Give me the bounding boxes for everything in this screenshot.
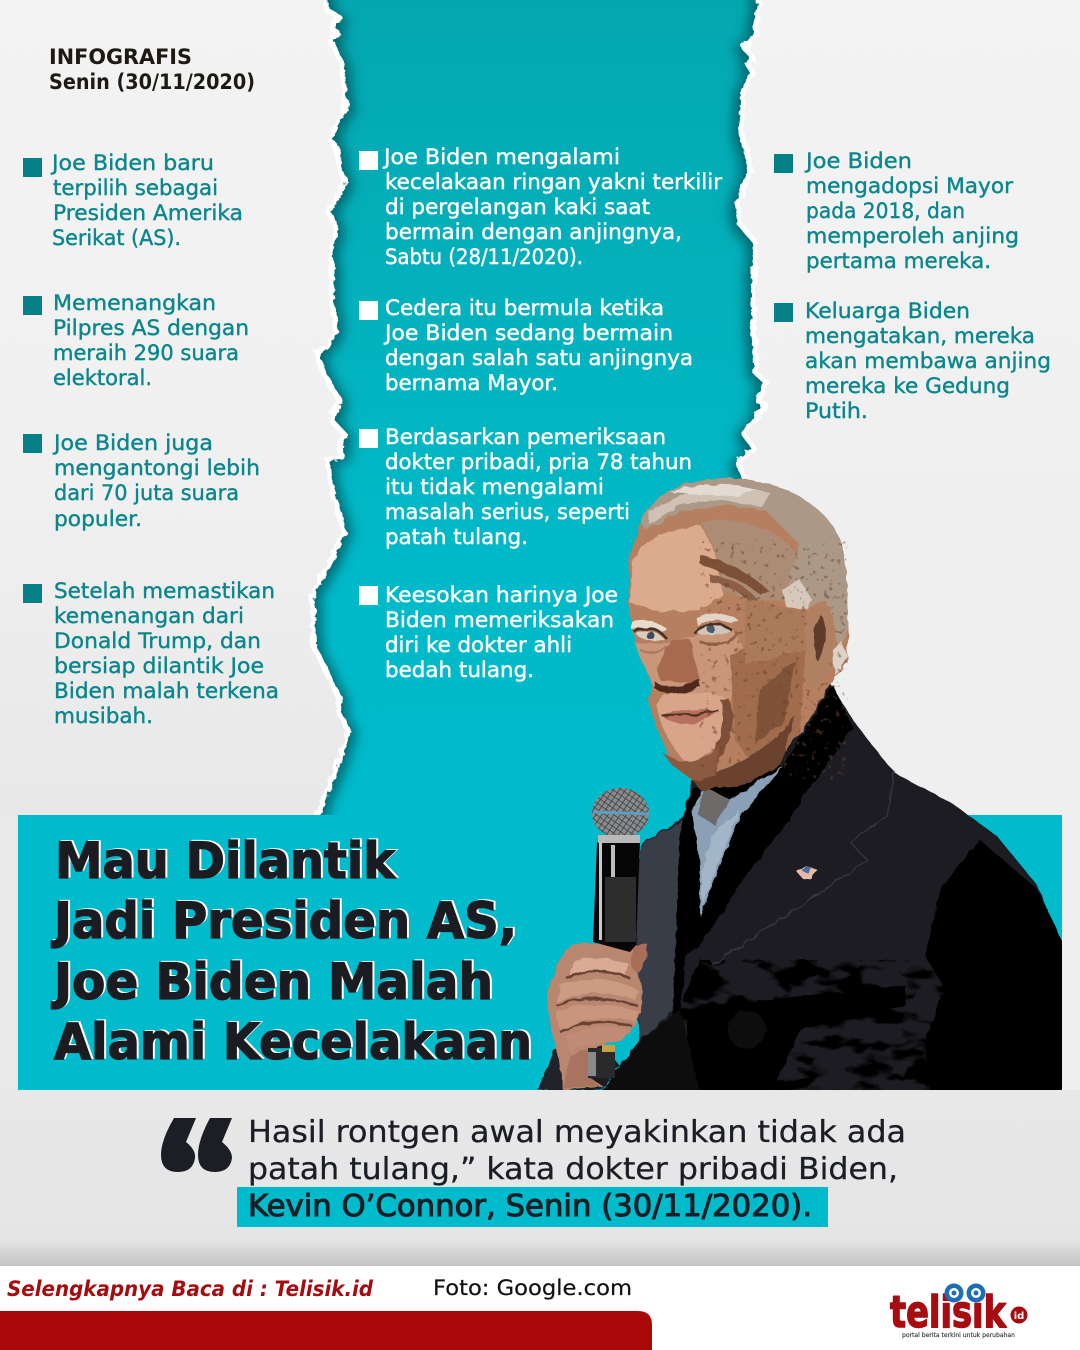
bullet item: Gedung Putih: akan membawa anjing <box>805 349 1051 373</box>
bullet item: kecelakaan ringan <box>359 145 722 269</box>
panel: left margin below paper <box>0 815 18 1090</box>
title: Alami Kecelakaan <box>54 1013 532 1071</box>
bullet item: adopsi Mayor: pada 2018, dan <box>806 199 965 223</box>
bullet item: adopsi Mayor: pertama mereka. <box>806 249 991 273</box>
quote text <box>248 1115 906 1224</box>
bullet item: 290 suara elektoral: Memenangkan <box>53 291 216 315</box>
header text: Senin (30/11/2020) <box>49 70 255 94</box>
panel: torn teal centre strip <box>300 0 780 830</box>
panel: title box <box>18 815 1062 1090</box>
bullet item: musibah: Setelah memastikan <box>54 579 275 603</box>
panel: quote strip <box>0 1090 1080 1266</box>
bullet item: terpilih: Presiden Amerika <box>53 201 243 225</box>
logo: telisik.id: portal berita terkini untuk perubahan <box>902 1331 1015 1339</box>
bullet item: Gedung Putih: mereka ke Gedung <box>805 374 1010 398</box>
title: Mau Dilantik <box>57 831 399 889</box>
bullet item: adopsi Mayor <box>774 149 1019 273</box>
logo: telisik.id: telisik <box>890 1287 1007 1338</box>
bullet item: musibah: Donald Trump, dan <box>54 629 261 653</box>
bullet item: pemeriksaan dokter: Berdasarkan pemeriksaan <box>385 425 666 449</box>
bullet item: 70 juta suara populer: mengantongi lebih <box>54 456 260 480</box>
bullet item: kecelakaan ringan: di pergelangan kaki saat <box>385 195 650 219</box>
panel: right column bullets <box>774 149 1051 423</box>
bullet item: pemeriksaan dokter: masalah serius, seperti <box>385 500 630 524</box>
microphone <box>588 788 649 1078</box>
bullet item: cedera: Cedera itu bermula ketika <box>385 296 664 320</box>
bullet item: pemeriksaan dokter <box>359 425 692 549</box>
bullet item: pemeriksaan dokter: itu tidak mengalami <box>385 475 604 499</box>
head <box>628 478 848 790</box>
panel: right torn paper <box>738 0 1080 1130</box>
title: Joe Biden Malah <box>51 953 493 1011</box>
bullet item: 290 suara elektoral: meraih 290 suara <box>53 341 239 365</box>
title: Alami Kecelakaan <box>56 1012 534 1070</box>
bullet item: pemeriksaan dokter: patah tulang. <box>385 525 528 549</box>
bullet item: dokter ahli bedah: Biden memeriksakan <box>385 608 614 632</box>
bullet item: Gedung Putih: Putih. <box>805 399 868 423</box>
shirt collar <box>692 766 783 917</box>
bullet item: cedera: dengan salah satu anjingnya <box>385 346 693 370</box>
title: Jadi Presiden AS, <box>51 892 517 950</box>
title: Mau Dilantik <box>55 832 397 890</box>
bullet item: kecelakaan ringan: kecelakaan ringan yakni terkilir <box>385 170 722 194</box>
bullet item: kecelakaan ringan: Joe Biden mengalami <box>382 145 620 169</box>
bullet item: 290 suara elektoral <box>23 291 249 390</box>
title <box>51 831 534 1071</box>
bullet item: dokter ahli bedah <box>359 583 618 682</box>
bullet item: terpilih: Serikat (AS). <box>52 226 181 250</box>
footer photo credit: Foto: Google.com <box>433 1276 632 1300</box>
bullet item: terpilih: terpilih sebagai <box>53 176 218 200</box>
bullet item: pemeriksaan dokter: dokter pribadi, pria 78 tahun <box>385 450 692 474</box>
bullet item: 70 juta suara populer <box>23 431 260 531</box>
eyes and brows <box>632 613 742 653</box>
logo binoculars <box>944 1284 986 1302</box>
bullet item: Gedung Putih <box>774 299 1051 423</box>
panel: left torn paper <box>0 0 349 1130</box>
bullet item: musibah: bersiap dilantik Joe <box>54 654 264 678</box>
bullet item: musibah: Biden malah terkena <box>54 679 279 703</box>
header text <box>49 45 255 94</box>
panel: left column bullets <box>23 151 279 728</box>
ear <box>804 603 835 688</box>
bullet item: kecelakaan ringan: Sabtu (28/11/2020). <box>385 245 583 269</box>
illustration: Joe Biden with microphone <box>538 478 1066 1094</box>
bullet item: dokter ahli bedah: Keesokan harinya Joe <box>385 583 618 607</box>
icon: quotation marks <box>161 1118 232 1172</box>
bullet item: Gedung Putih: Keluarga Biden <box>805 299 970 323</box>
hand <box>547 942 647 1090</box>
bullet item: adopsi Mayor: Joe Biden <box>804 149 912 173</box>
bullet item: cedera: Joe Biden sedang bermain <box>383 321 673 345</box>
bullet item: cedera: bernama Mayor. <box>385 371 558 395</box>
bullet item: cedera <box>359 296 693 395</box>
bullet item: Gedung Putih: mengatakan, mereka <box>805 324 1035 348</box>
panel: right side paper lower area <box>790 470 1080 1090</box>
bullet item: kecelakaan ringan: bermain dengan anjingnya, <box>385 220 682 244</box>
quote text: Hasil rontgen awal meyakinkan tidak ada <box>248 1115 906 1150</box>
bullet item: adopsi Mayor: memperoleh anjing <box>806 224 1019 248</box>
quote text: Kevin O’Connor, Senin (30/11/2020). <box>248 1189 812 1224</box>
bullet item: 70 juta suara populer: dari 70 juta suara <box>54 481 239 505</box>
header text: INFOGRAFIS <box>49 45 192 69</box>
bullet item: 290 suara elektoral: Pilpres AS dengan <box>53 316 249 340</box>
bullet item: adopsi Mayor: mengadopsi Mayor <box>806 174 1013 198</box>
bullet item: musibah: kemenangan dari <box>54 604 244 628</box>
bullet item: 70 juta suara populer: Joe Biden juga <box>52 431 213 455</box>
jacket <box>538 683 1066 1094</box>
bullet item: terpilih: Joe Biden baru <box>50 151 214 175</box>
footer source link: Selengkapnya Baca di : Telisik.id <box>7 1277 374 1301</box>
flag pin <box>797 866 818 879</box>
title: Jadi Presiden AS, <box>53 891 519 949</box>
bullet item: terpilih <box>23 151 243 250</box>
bullet item: musibah <box>23 579 279 728</box>
bullet item: dokter ahli bedah: bedah tulang. <box>385 658 534 682</box>
bullet item: 70 juta suara populer: populer. <box>54 507 142 531</box>
footer red bar <box>0 1311 652 1350</box>
logo: telisik.id: id <box>1014 1311 1024 1322</box>
title: Joe Biden Malah <box>53 952 495 1010</box>
bullet item: 290 suara elektoral: elektoral. <box>53 366 152 390</box>
panel: centre column bullets <box>359 145 722 682</box>
bullet item: dokter ahli bedah: diri ke dokter ahli <box>385 633 572 657</box>
bullet item: musibah: musibah. <box>54 704 153 728</box>
panel: footer <box>0 1266 1080 1350</box>
highlight bar behind attribution <box>237 1187 828 1227</box>
quote text: patah tulang,” kata dokter pribadi Biden, <box>248 1152 898 1187</box>
